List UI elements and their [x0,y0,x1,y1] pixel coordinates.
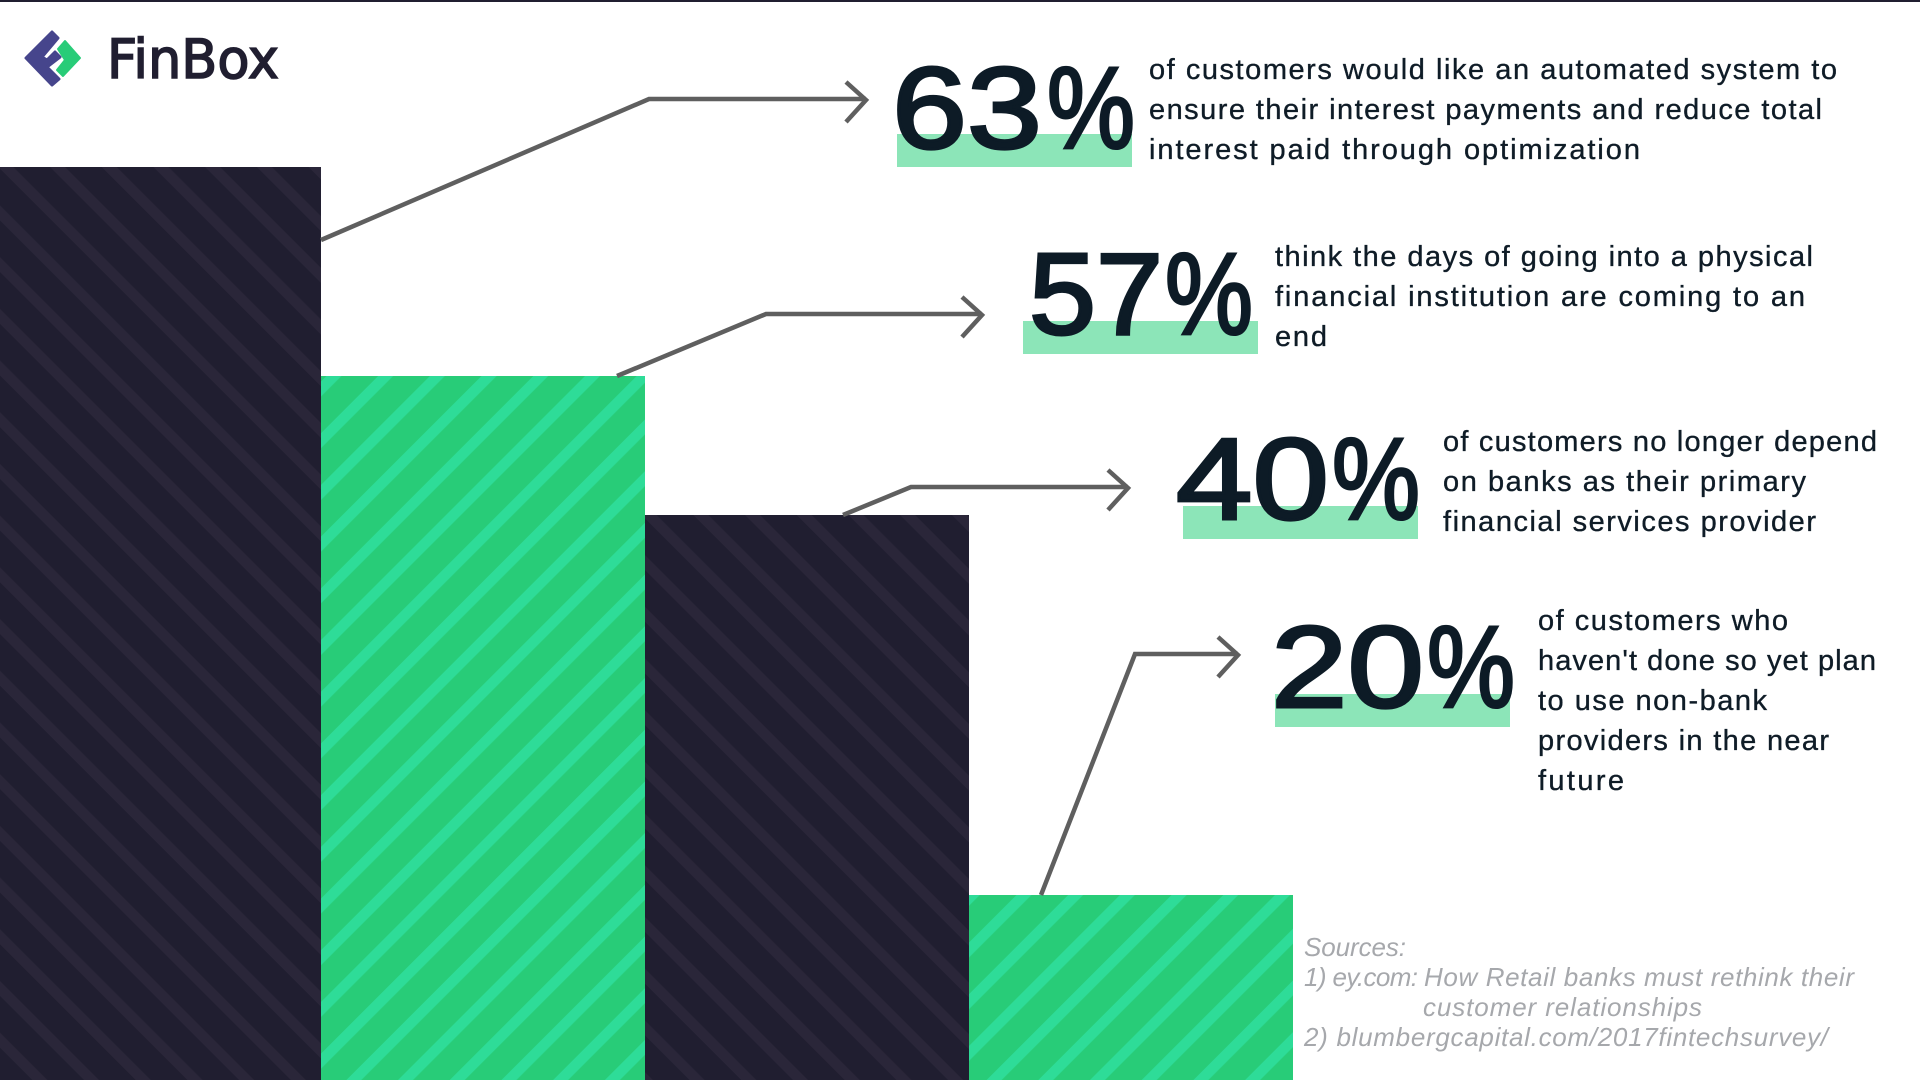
description: think the days of going into a physical [1275,241,1813,273]
arrow: bar 1 to 63% [321,82,866,240]
stat: 20% [1271,602,1876,797]
number: 63 [892,43,1042,173]
number: % [1332,414,1420,544]
number: 57 [1029,229,1163,359]
highlight [1023,321,1258,354]
sources [1303,932,1855,1052]
description: financial services provider [1443,506,1816,538]
description: of customers who [1538,605,1788,637]
stat: 57% [1023,229,1813,359]
logo wordmark: FinBox [107,28,279,91]
bar 2: 57% [321,376,645,1080]
number: % [1427,602,1515,732]
icon: FinBox diamond mark [26,32,80,85]
stat: 40% [1176,414,1877,544]
bar 3: 40% [645,515,969,1080]
sources: 1) ey.com: [1304,962,1418,992]
description: of customers no longer depend [1443,426,1877,458]
sources: How Retail banks must rethink their [1424,962,1855,992]
number: % [1047,43,1135,173]
highlight [1183,506,1418,539]
description: to use non-bank [1538,685,1768,717]
bar 1: 63% [0,167,321,1080]
description: providers in the near [1538,725,1829,757]
number: 20 [1271,602,1424,732]
arrow: bar 4 to 20% [1041,637,1238,895]
description: future [1538,765,1624,797]
number: 40 [1176,414,1329,544]
stat: 63% [892,43,1837,173]
sources: 2) blumbergcapital.com/2017fintechsurvey/ [1303,1022,1831,1052]
description: interest paid through optimization [1149,134,1640,166]
highlight [897,134,1132,167]
description [1443,426,1877,538]
sources: Sources: [1304,932,1406,962]
bar 4: 20% [969,895,1293,1080]
description: on banks as their primary [1443,466,1806,498]
description: financial institution are coming to an [1275,281,1805,313]
highlight [1275,694,1510,727]
description [1149,54,1837,166]
bar chart: descending striped bars [0,167,1293,1080]
arrow: bar 3 to 40% [843,470,1128,515]
number: % [1165,229,1253,359]
description: haven't done so yet plan [1538,645,1876,677]
description [1275,241,1813,353]
description [1538,605,1876,797]
sources: customer relationships [1423,992,1702,1022]
description: end [1275,321,1327,353]
description: of customers would like an automated system to [1149,54,1837,86]
logo: FinBox [26,28,279,91]
arrow: bar 2 to 57% [617,297,982,376]
description: ensure their interest payments and reduce total [1149,94,1822,126]
